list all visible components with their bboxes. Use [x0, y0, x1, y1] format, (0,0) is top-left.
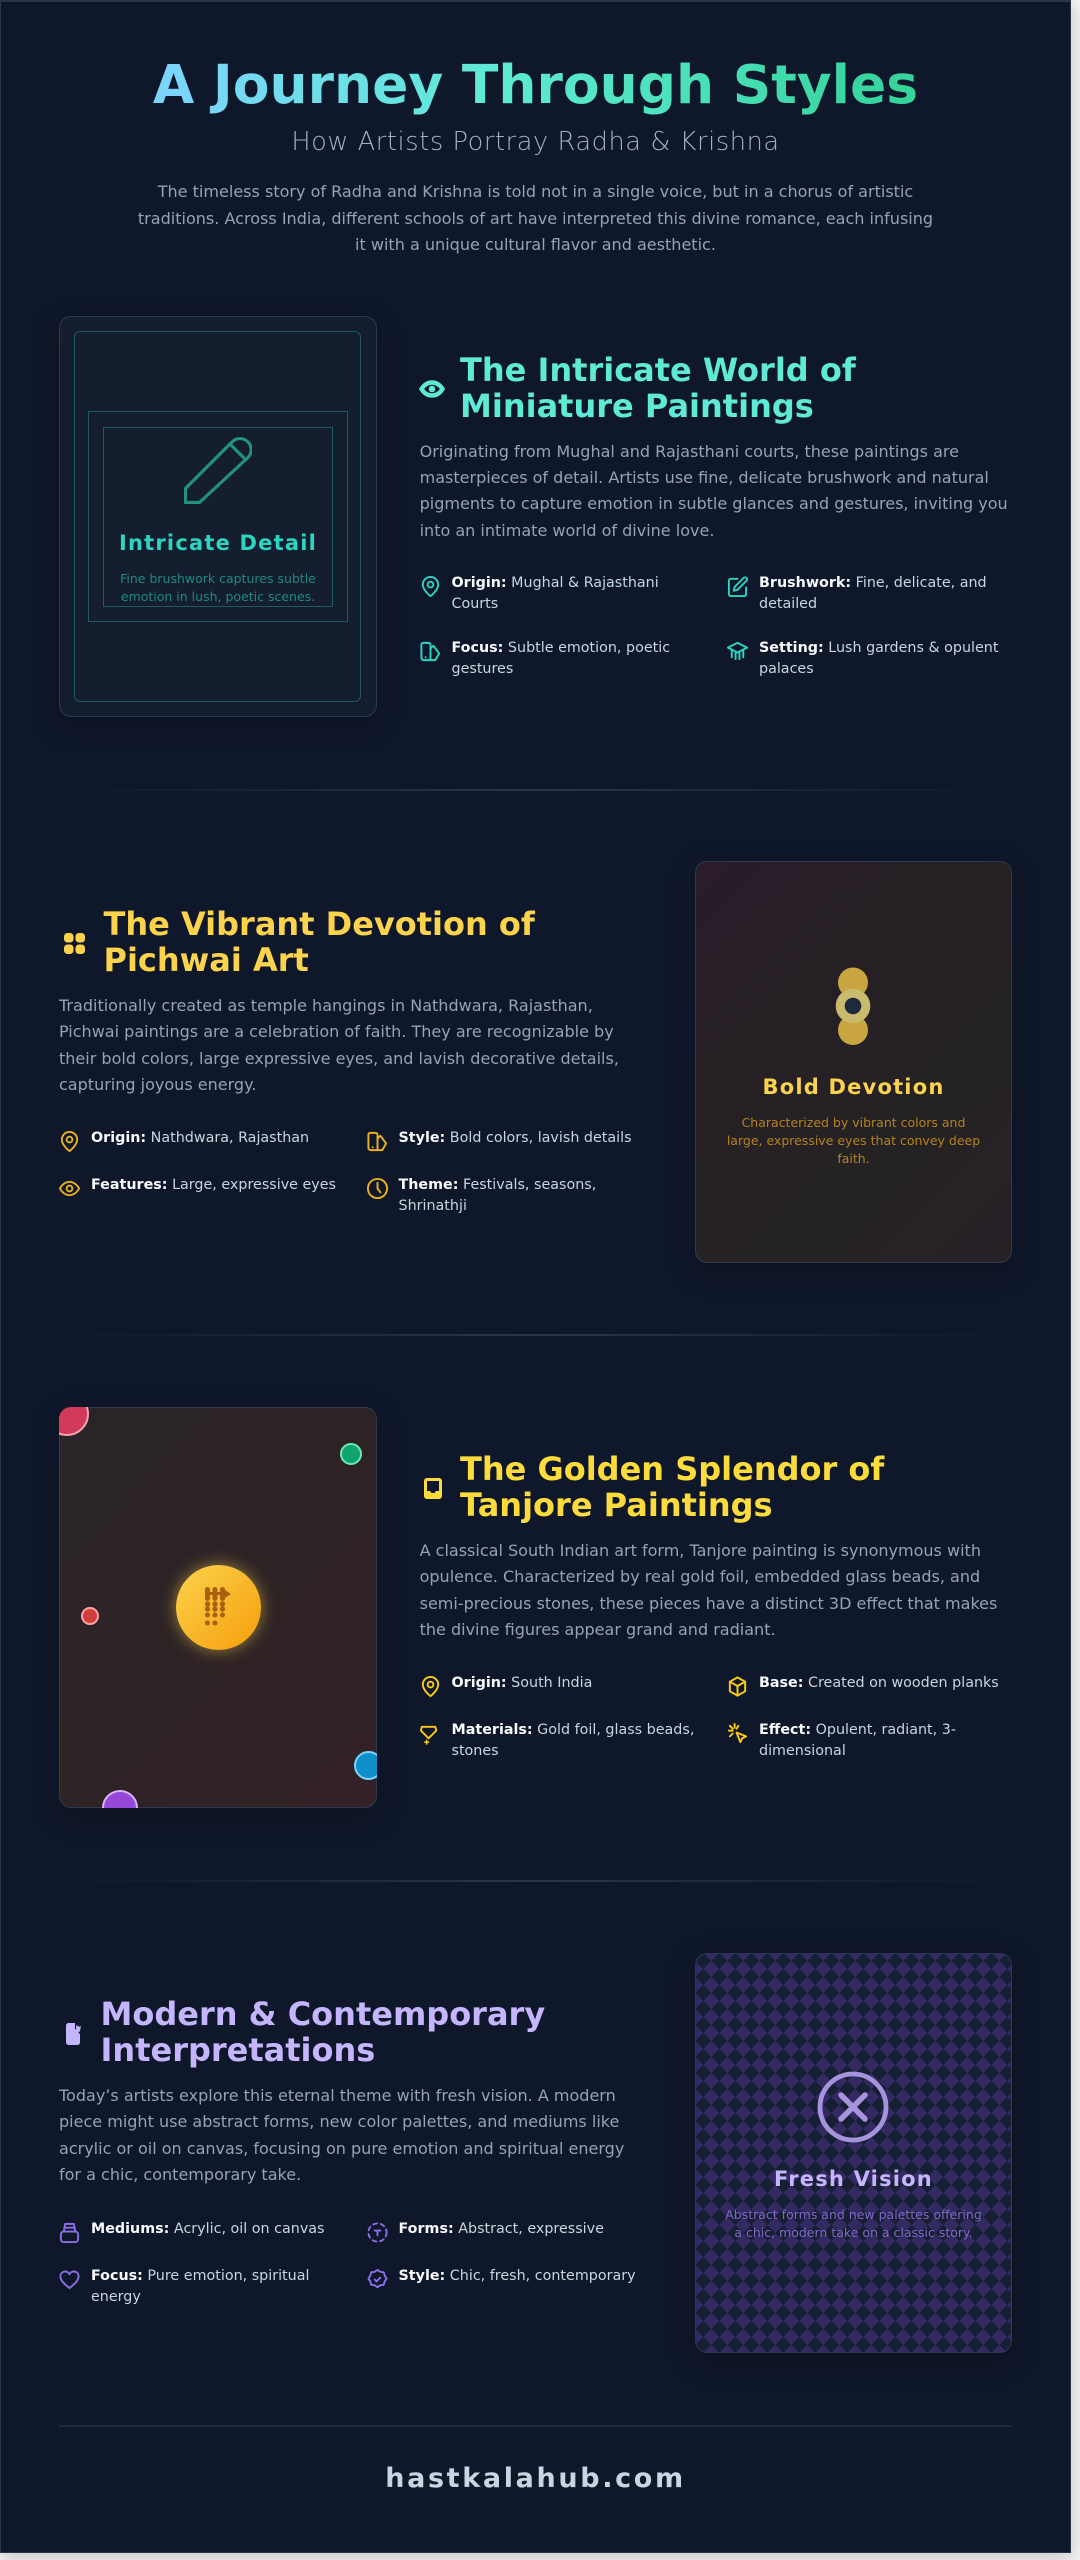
description [420, 1541, 997, 1639]
panel: gold and gems card [59, 1407, 377, 1808]
heading: Pichwai Art [104, 941, 309, 979]
card title: Fresh Vision [774, 2167, 933, 2191]
feature list [420, 1674, 999, 1759]
heading [419, 351, 856, 425]
item: effect: dimensional [759, 1743, 846, 1759]
description: A classical South Indian art form, Tanjore painting is synonymous with [420, 1541, 981, 1560]
heading: The Vibrant Devotion of [104, 905, 535, 943]
section: modern and contemporary [58, 1953, 1012, 2353]
card title: Intricate Detail [119, 531, 317, 555]
intro text: The timeless story of Radha and Krishna is told not in a single voice, but in a chorus of artistic [158, 182, 913, 201]
item: origin: Origin: Nathdwara, Rajasthan [91, 1130, 309, 1146]
item: origin [422, 574, 659, 612]
feature list [59, 1130, 632, 1214]
item: effect: Effect: Opulent, radiant, 3- [759, 1722, 956, 1738]
item: features: Features: Large, expressive eyes [91, 1176, 336, 1192]
icon: circled x [815, 2069, 891, 2145]
item: origin [422, 1674, 592, 1698]
heading: Interpretations [100, 2031, 375, 2069]
subtitle: How Artists Portray Radha & Krishna [291, 127, 780, 157]
section: miniature paintings [59, 316, 1008, 717]
item: style: Style: Bold colors, lavish details [398, 1130, 632, 1146]
heading: The Golden Splendor of [460, 1450, 884, 1488]
card description: faith. [837, 1151, 870, 1166]
description: the divine figures appear grand and radiant. [420, 1620, 776, 1639]
section: tanjore paintings [59, 1407, 999, 1808]
description: masterpieces of detail. Artists use fine, delicate brushwork and natural [420, 468, 989, 487]
gem: green [340, 1443, 362, 1465]
description: opulence. Characterized by real gold foil, embedded glass beads, and [420, 1567, 980, 1586]
item: mediums: Mediums: Acrylic, oil on canvas [91, 2220, 324, 2236]
item: focus [420, 640, 670, 677]
description: into an intimate world of divine love. [420, 521, 714, 540]
card description: a chic, modern take on a classic story. [734, 2225, 973, 2240]
panel: intricate detail card [59, 316, 377, 717]
description [420, 442, 1008, 540]
card description: large, expressive eyes that convey deep [727, 1133, 980, 1148]
heading: Tanjore Paintings [460, 1486, 773, 1524]
item: origin: Origin: Mughal & Rajasthani [452, 574, 659, 590]
item: origin [60, 1130, 309, 1152]
icon: flower [836, 968, 870, 1045]
panel: bold devotion card [695, 861, 1012, 1263]
heading [64, 905, 536, 979]
item: focus: energy [91, 2289, 141, 2305]
description: piece might use abstract forms, new color palettes, and mediums like [59, 2112, 619, 2131]
icon: pencil [184, 437, 252, 504]
website: hastkalahub.com [385, 2462, 686, 2494]
heading: Modern & Contemporary [100, 1995, 545, 2033]
item: materials: stones [452, 1743, 499, 1759]
feature list [59, 2220, 636, 2305]
card description: Abstract forms and new palettes offering [725, 2207, 982, 2222]
card description: Fine brushwork captures subtle [120, 571, 316, 586]
section: pichwai art [58, 861, 1012, 1263]
item: effect [728, 1722, 956, 1759]
intro text: it with a unique cultural flavor and aesthetic. [355, 235, 716, 254]
item: setting: palaces [759, 661, 814, 677]
description: for a chic, contemporary take. [59, 2165, 301, 2184]
icon: tray [424, 1478, 442, 1499]
heading [424, 1450, 885, 1524]
item: brushwork: detailed [759, 596, 817, 612]
item: focus [58, 2266, 343, 2308]
item: theme: Theme: Festivals, seasons, [398, 1176, 596, 1192]
gold medallion [176, 1564, 260, 1650]
item: theme [366, 1176, 596, 1214]
gem: red [45, 1392, 89, 1436]
description: Originating from Mughal and Rajasthani courts, these paintings are [420, 442, 959, 460]
item: materials: Materials: Gold foil, glass beads, [452, 1722, 694, 1738]
card description: Characterized by vibrant colors and [742, 1115, 965, 1130]
heading: The Intricate World of [460, 351, 856, 389]
item: brushwork: Brushwork: Fine, delicate, and [759, 574, 987, 590]
item: origin: Origin: South India [452, 1674, 592, 1690]
gem: blue [354, 1750, 382, 1780]
intro text: traditions. Across India, different schools of art have interpreted this divine romance, each infusing [138, 208, 933, 228]
item: focus: Focus: Subtle emotion, poetic [452, 640, 670, 656]
item: mediums [58, 2218, 343, 2240]
title: A Journey Through Styles [153, 52, 918, 116]
feature list [420, 574, 998, 677]
item: base: Base: Created on wooden planks [759, 1674, 999, 1690]
description: capturing joyous energy. [59, 1075, 256, 1094]
card title: Bold Devotion [762, 1075, 944, 1099]
item: style [367, 1130, 632, 1152]
card description [727, 1115, 980, 1166]
icon: four dots [64, 933, 85, 954]
icon: eye [419, 380, 445, 398]
gem: small red [81, 1607, 99, 1625]
item: style: Style: Chic, fresh, contemporary [398, 2268, 636, 2284]
card description: emotion in lush, poetic scenes. [121, 589, 315, 604]
description: Today’s artists explore this eternal theme with fresh vision. A modern [59, 2086, 616, 2105]
card description [695, 2206, 1012, 2242]
description: semi-precious stones, these pieces have a distinct 3D effect that makes [420, 1594, 997, 1613]
item: base [728, 1674, 999, 1697]
description: Pichwai paintings are a celebration of faith. They are recognizable by [59, 1022, 614, 1041]
description [58, 2086, 624, 2184]
description: their bold colors, large expressive eyes, and lavish decorative details, [59, 1049, 619, 1068]
gem: purple [102, 1790, 138, 1826]
item: theme: Shrinathji [398, 1198, 467, 1214]
item: setting [727, 640, 998, 677]
header [138, 52, 933, 254]
description: pigments to capture emotion in subtle glances and gestures, inviting you [420, 494, 1008, 513]
item: focus: gestures [452, 661, 513, 677]
item: forms [366, 2218, 650, 2240]
description: acrylic or oil on canvas, focusing on pure emotion and spiritual energy [59, 2139, 624, 2158]
item: setting: Setting: Lush gardens & opulent [759, 640, 998, 656]
panel: fresh vision card [695, 1953, 1012, 2353]
heading: Miniature Paintings [460, 387, 814, 425]
icon: device with hand [66, 2023, 81, 2045]
item: brushwork [728, 574, 987, 612]
heading [66, 1995, 545, 2069]
item: forms: Forms: Abstract, expressive [398, 2220, 604, 2236]
card description [120, 571, 316, 604]
item: style [366, 2266, 650, 2288]
description: Traditionally created as temple hangings in Nathdwara, Rajasthan, [59, 996, 593, 1015]
intro text [138, 182, 933, 254]
item: materials [420, 1722, 694, 1759]
item: focus: Focus: Pure emotion, spiritual [91, 2268, 309, 2284]
footer [59, 2425, 1012, 2505]
icon: beads [204, 1587, 231, 1626]
item: origin: Courts [452, 596, 498, 612]
description [58, 996, 619, 1094]
